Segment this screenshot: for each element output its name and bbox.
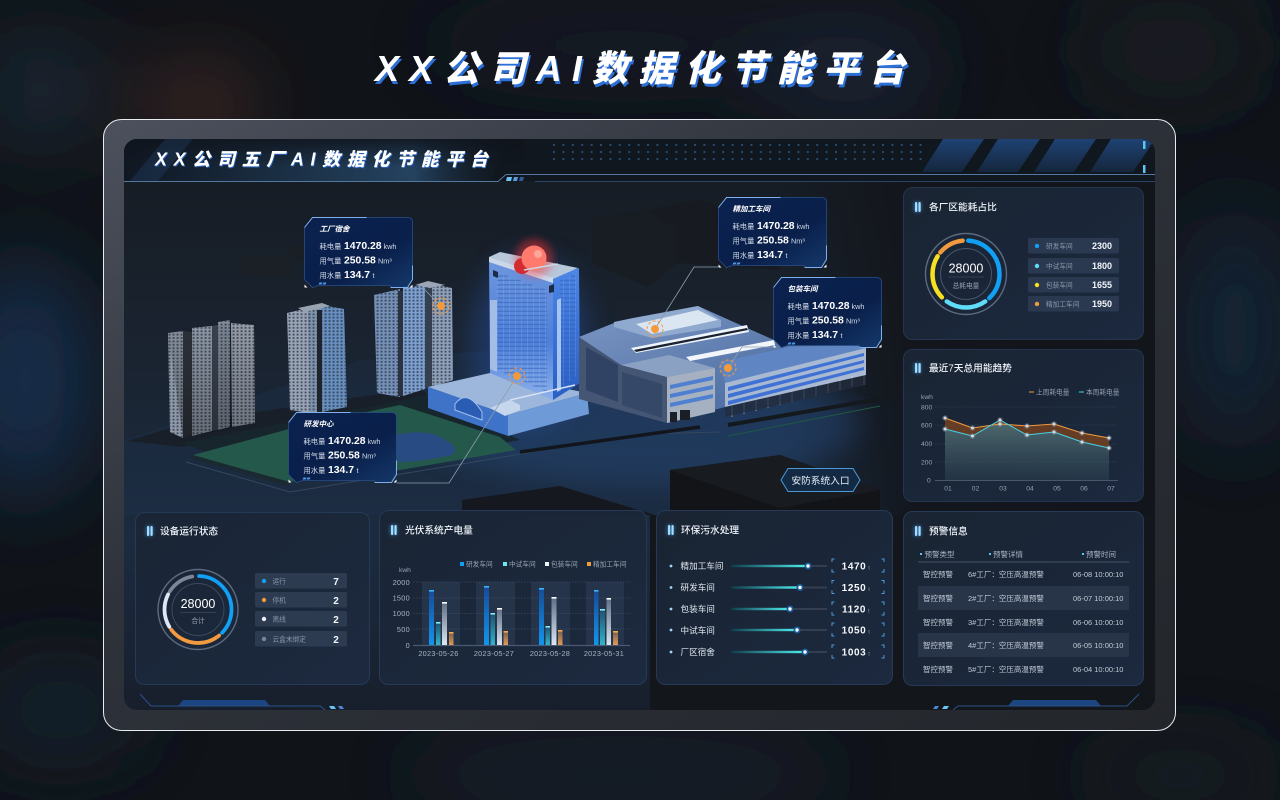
callout: 工厂宿舍: 250.58 bbox=[344, 256, 376, 266]
callout: 研发中心: Nm³ bbox=[362, 452, 376, 460]
device status donut: 28000 bbox=[181, 597, 215, 611]
callout: 精加工车间: 1470.28 bbox=[757, 221, 795, 232]
callout: 精加工车间: t bbox=[786, 251, 788, 260]
alert table bbox=[918, 549, 1129, 674]
line chart: 200 bbox=[921, 460, 932, 466]
alert table: 智控预警 bbox=[923, 617, 953, 627]
residential tower 3 bbox=[374, 281, 453, 397]
residential tower 2 bbox=[287, 303, 347, 413]
red alarm beacon bbox=[514, 239, 558, 277]
energy legend: 精加工车间 bbox=[1046, 300, 1080, 308]
bar chart: 2023-05-27 bbox=[474, 649, 514, 658]
header bar bbox=[124, 139, 1155, 182]
panel heading: 设备运行状态 bbox=[160, 524, 218, 538]
bar chart: 2023-05-28 bbox=[530, 649, 570, 658]
bar chart: 0 bbox=[406, 641, 410, 650]
callout: 包装车间: 用气量 bbox=[788, 316, 809, 326]
bar chart legend: 精加工车间 bbox=[593, 560, 627, 568]
device status legend: 离线 bbox=[272, 614, 286, 624]
line chart: 06 bbox=[1080, 486, 1088, 492]
row: 中试车间 bbox=[670, 623, 884, 636]
bottom left ornament bbox=[140, 694, 344, 710]
alert table: 预警类型 bbox=[924, 549, 955, 559]
callout: 研发中心: 用气量 bbox=[304, 452, 325, 460]
research centre tower and podium bbox=[428, 252, 590, 436]
energy legend bbox=[1028, 238, 1119, 312]
device frame bbox=[104, 120, 1176, 730]
device status legend: 2 bbox=[333, 615, 339, 626]
row: 厂区宿舍 bbox=[670, 645, 884, 658]
line chart: 01 bbox=[944, 486, 952, 492]
row: 中试车间: 中试车间 bbox=[680, 624, 715, 636]
row: 包装车间: 1120 t bbox=[842, 604, 870, 616]
trend legend bbox=[1029, 388, 1120, 396]
device status legend: 2 bbox=[333, 596, 339, 607]
callout: 精加工车间: 用水量 bbox=[732, 251, 754, 260]
line chart: 400 bbox=[921, 441, 932, 448]
line chart: 05 bbox=[1053, 486, 1061, 492]
callout: 精加工车间: 134.7 bbox=[757, 250, 783, 261]
callout: 工厂宿舍 bbox=[304, 218, 412, 288]
callout: 包装车间: t bbox=[840, 331, 843, 340]
callout: 研发中心: 134.7 bbox=[328, 465, 354, 476]
main title: XX公司AI数据化节能平台 bbox=[373, 48, 908, 89]
line chart: 04 bbox=[1026, 486, 1034, 492]
alert table: 4#工厂：空压高温预警 bbox=[968, 640, 1044, 650]
line chart: 07 bbox=[1107, 486, 1115, 492]
panel: 各厂区能耗占比 bbox=[904, 188, 1144, 340]
alert table: 06-06 10:00:10 bbox=[1073, 618, 1123, 627]
energy donut: 28000 bbox=[949, 262, 983, 276]
security entrance button bbox=[781, 468, 860, 492]
trend legend: 本周耗电量 bbox=[1086, 388, 1120, 396]
callout: 包装车间: 包装车间 bbox=[788, 284, 819, 294]
panel: 预警信息 bbox=[904, 512, 1144, 686]
alert table: 2#工厂：空压高温预警 bbox=[968, 593, 1044, 603]
callout: 工厂宿舍: 工厂宿舍 bbox=[320, 224, 351, 234]
3D factory scene bbox=[124, 180, 1155, 710]
callout: 包装车间: 用水量 bbox=[788, 331, 809, 340]
bar chart legend: 包装车间 bbox=[551, 560, 578, 568]
lawn and pond bbox=[190, 405, 516, 486]
bar chart legend: 中试车间 bbox=[509, 560, 536, 568]
bar chart legend: 研发车间 bbox=[466, 560, 493, 568]
bar chart: 2023-05-26 bbox=[418, 649, 459, 658]
line chart: 0 bbox=[927, 478, 931, 484]
panel heading: 光伏系统产电量 bbox=[405, 524, 473, 536]
callout: 包装车间: 250.58 bbox=[812, 316, 844, 326]
alert table: 3#工厂：空压高温预警 bbox=[968, 617, 1044, 627]
dashboard screen bbox=[124, 139, 1155, 710]
alert table: 智控预警 bbox=[923, 593, 953, 603]
panel heading: 各厂区能耗占比 bbox=[929, 200, 997, 214]
callout: 精加工车间: kwh bbox=[796, 222, 809, 231]
bar chart: kwh bbox=[399, 567, 411, 574]
callout: 工厂宿舍: 用水量 bbox=[320, 271, 341, 280]
panel: 最近7天总用能趋势 bbox=[904, 350, 1144, 502]
callout: 工厂宿舍: 134.7 bbox=[344, 270, 370, 281]
row: 包装车间 bbox=[670, 602, 884, 616]
callout: 工厂宿舍: 用气量 bbox=[320, 256, 341, 266]
panel heading bbox=[667, 524, 739, 536]
security entrance button: 安防系统入口 bbox=[791, 474, 850, 487]
callout: 研发中心 bbox=[288, 412, 396, 482]
bar chart: 500 bbox=[397, 625, 410, 634]
callout: 研发中心: kwh bbox=[368, 437, 380, 446]
row: 研发车间: 1250 t bbox=[842, 583, 870, 594]
callout: 工厂宿舍: 1470.28 bbox=[344, 241, 382, 252]
marker: packing bbox=[720, 360, 736, 376]
device status legend: 云盒未绑定 bbox=[272, 634, 306, 644]
row: 包装车间: 包装车间 bbox=[680, 603, 715, 614]
energy legend: 1950 bbox=[1092, 299, 1112, 309]
row: 精加工车间 bbox=[670, 559, 884, 572]
bar chart legend bbox=[460, 560, 626, 568]
callout: 研发中心: 250.58 bbox=[328, 450, 360, 462]
energy legend: 研发车间 bbox=[1046, 242, 1073, 250]
callout: 工厂宿舍: t bbox=[372, 271, 375, 280]
alert table: 06-08 10:00:10 bbox=[1073, 570, 1123, 579]
energy legend: 2300 bbox=[1092, 241, 1112, 251]
device status donut: 合计 bbox=[191, 616, 205, 625]
row: 研发车间: 研发车间 bbox=[680, 582, 715, 592]
row: 厂区宿舍: 1003 t bbox=[842, 648, 870, 658]
alert table: 智控预警 bbox=[923, 664, 953, 674]
callout: 研发中心: 研发中心 bbox=[304, 420, 334, 428]
panel heading bbox=[146, 524, 218, 538]
callout: 研发中心: 耗电量 bbox=[304, 437, 325, 446]
callout: 精加工车间: Nm³ bbox=[791, 236, 805, 246]
alert table: 06-07 10:00:10 bbox=[1073, 594, 1123, 603]
dashboard heading: XX公司五厂AI数据化节能平台 bbox=[154, 150, 490, 170]
bar chart: 1500 bbox=[393, 594, 410, 602]
bar chart: 1000 bbox=[393, 609, 410, 618]
bar chart bbox=[393, 567, 630, 658]
device status legend: 停机 bbox=[272, 596, 286, 604]
line chart bbox=[921, 394, 1118, 492]
callout: 研发中心: 1470.28 bbox=[328, 436, 366, 447]
row: 精加工车间: 1470 t bbox=[842, 562, 870, 572]
panel: 设备运行状态 bbox=[136, 512, 370, 684]
device status legend: 2 bbox=[333, 635, 339, 646]
alert table: 预警详情 bbox=[993, 549, 1023, 559]
marker: machining bbox=[647, 321, 663, 337]
callout: 包装车间: Nm³ bbox=[846, 316, 860, 326]
panel heading: 环保污水处理 bbox=[681, 524, 739, 536]
callout: 精加工车间: 250.58 bbox=[757, 236, 789, 246]
energy legend: 包装车间 bbox=[1046, 280, 1073, 290]
callout: 包装车间: 1470.28 bbox=[812, 301, 850, 312]
line chart: kwh bbox=[921, 394, 933, 401]
energy legend: 1800 bbox=[1092, 261, 1112, 271]
callout: 精加工车间: 耗电量 bbox=[732, 222, 754, 231]
line chart: 02 bbox=[972, 486, 979, 492]
alert table: 06-04 10:00:10 bbox=[1073, 665, 1123, 674]
row: 精加工车间: 精加工车间 bbox=[680, 560, 723, 571]
device status legend: 7 bbox=[333, 577, 339, 588]
dashboard heading: XX公司五厂AI数据化节能平台 bbox=[155, 151, 491, 171]
panel: 环保污水处理 bbox=[656, 510, 892, 684]
line chart: 03 bbox=[999, 486, 1007, 492]
device status legend: 运行 bbox=[272, 576, 286, 586]
panel: 光伏系统产电量 bbox=[380, 510, 646, 684]
alert table: 06-05 10:00:10 bbox=[1073, 641, 1123, 650]
panel heading: 最近7天总用能趋势 bbox=[929, 362, 1012, 374]
row: 厂区宿舍: 厂区宿舍 bbox=[680, 646, 715, 657]
alert table: 6#工厂：空压高温预警 bbox=[968, 569, 1044, 579]
factory workshops bbox=[579, 306, 866, 423]
alert table: 预警时间 bbox=[1086, 549, 1116, 559]
callout: 包装车间 bbox=[774, 278, 882, 348]
callout: 工厂宿舍: 耗电量 bbox=[320, 242, 341, 251]
callout: 研发中心: t bbox=[356, 466, 359, 475]
bottom right ornament bbox=[933, 694, 1139, 710]
callout: 精加工车间 bbox=[718, 198, 826, 268]
row: 中试车间: 1050 t bbox=[842, 626, 870, 636]
device status donut bbox=[158, 570, 238, 650]
main title: XX公司AI数据化节能平台 bbox=[374, 51, 909, 92]
bar chart: 2000 bbox=[393, 578, 410, 587]
line chart: 800 bbox=[921, 404, 932, 412]
energy donut bbox=[926, 234, 1006, 314]
panel heading bbox=[914, 524, 968, 538]
panel heading: 预警信息 bbox=[929, 524, 968, 538]
callout: 包装车间: 134.7 bbox=[812, 330, 838, 341]
alert table: 智控预警 bbox=[923, 569, 953, 579]
callout: 精加工车间: 用气量 bbox=[732, 236, 754, 246]
callout: 工厂宿舍: kwh bbox=[384, 242, 396, 251]
marker: residential bbox=[433, 298, 449, 314]
panel heading bbox=[914, 200, 997, 214]
path from callouts to markers bbox=[397, 267, 773, 483]
line chart: 600 bbox=[921, 422, 932, 430]
callout: 包装车间: 耗电量 bbox=[788, 302, 809, 311]
callout: 包装车间: kwh bbox=[852, 302, 864, 311]
marker: research bbox=[509, 368, 525, 384]
energy legend: 1655 bbox=[1092, 280, 1112, 290]
bar chart: 2023-05-31 bbox=[584, 649, 624, 658]
callout: 精加工车间: 精加工车间 bbox=[732, 204, 771, 214]
row: 研发车间 bbox=[670, 580, 884, 594]
energy donut: 总耗电量 bbox=[953, 281, 980, 290]
alert table: 智控预警 bbox=[923, 640, 953, 650]
alert table: 5#工厂：空压高温预警 bbox=[968, 664, 1044, 674]
callout: 研发中心: 用水量 bbox=[304, 466, 325, 475]
panel heading bbox=[390, 524, 473, 536]
device status legend bbox=[255, 573, 347, 646]
callout: 工厂宿舍: Nm³ bbox=[378, 256, 392, 266]
energy legend: 中试车间 bbox=[1046, 262, 1073, 270]
residential tower 1 bbox=[168, 320, 255, 438]
trend legend: 上周耗电量 bbox=[1036, 388, 1070, 396]
